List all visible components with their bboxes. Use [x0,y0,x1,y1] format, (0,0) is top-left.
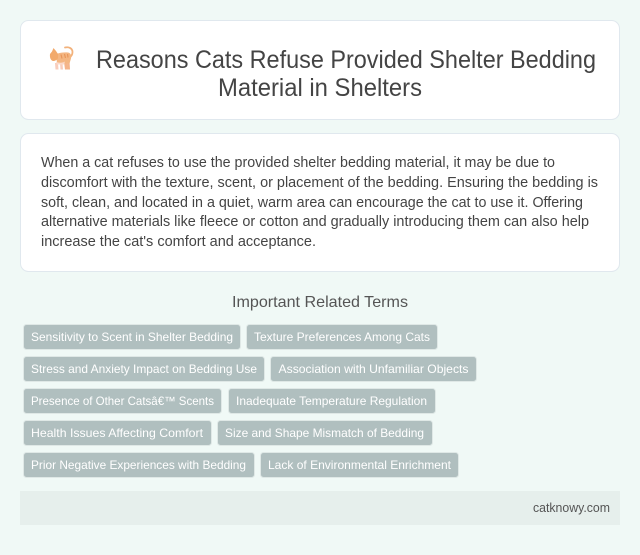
tag [246,324,438,350]
footer [20,491,620,525]
title: Reasons Cats Refuse Provided Shelter Bedding [96,46,596,74]
description text: alternative materials like fleece or cotton and gradually introducing them can also help [41,214,589,230]
tag [218,420,432,446]
description text: increase the cat's comfort and acceptance. [41,234,316,250]
tag: Sensitivity to Scent in Shelter Bedding [31,330,233,344]
description text [41,155,598,250]
tag: Stress and Anxiety Impact on Bedding Use [31,362,257,376]
tag: Presence of Other Catsâ€™ Scents [31,394,214,408]
description text: discomfort with the texture, scent, or placement of the bedding. Ensuring the bedding is [41,175,598,191]
tag: Size and Shape Mismatch of Bedding [225,426,424,440]
tag: Health Issues Affecting Comfort [31,426,204,440]
description text: soft, clean, and located in a quiet, warm area can encourage the cat to use it. Offering [41,195,583,211]
heading: related terms: Important Related Terms [232,294,408,311]
tag [24,324,240,350]
title [96,46,596,102]
tag: Association with Unfamiliar Objects [278,362,468,376]
icon: cat [50,47,72,70]
panel: description [20,134,620,272]
tag: Inadequate Temperature Regulation [236,394,427,408]
tag [260,452,458,478]
tag: Texture Preferences Among Cats [254,330,430,344]
tags [24,324,476,478]
title: Material in Shelters [218,74,422,102]
tag [24,356,264,382]
tag [228,388,436,414]
tag [270,356,476,382]
tag [24,452,254,478]
tag [24,420,212,446]
footer: catknowy.com [533,501,610,515]
description text: When a cat refuses to use the provided shelter bedding material, it may be due to [41,155,555,171]
tag: Lack of Environmental Enrichment [268,458,452,472]
tag: Prior Negative Experiences with Bedding [31,458,246,472]
tag [24,388,222,414]
panel: title card [20,20,620,120]
